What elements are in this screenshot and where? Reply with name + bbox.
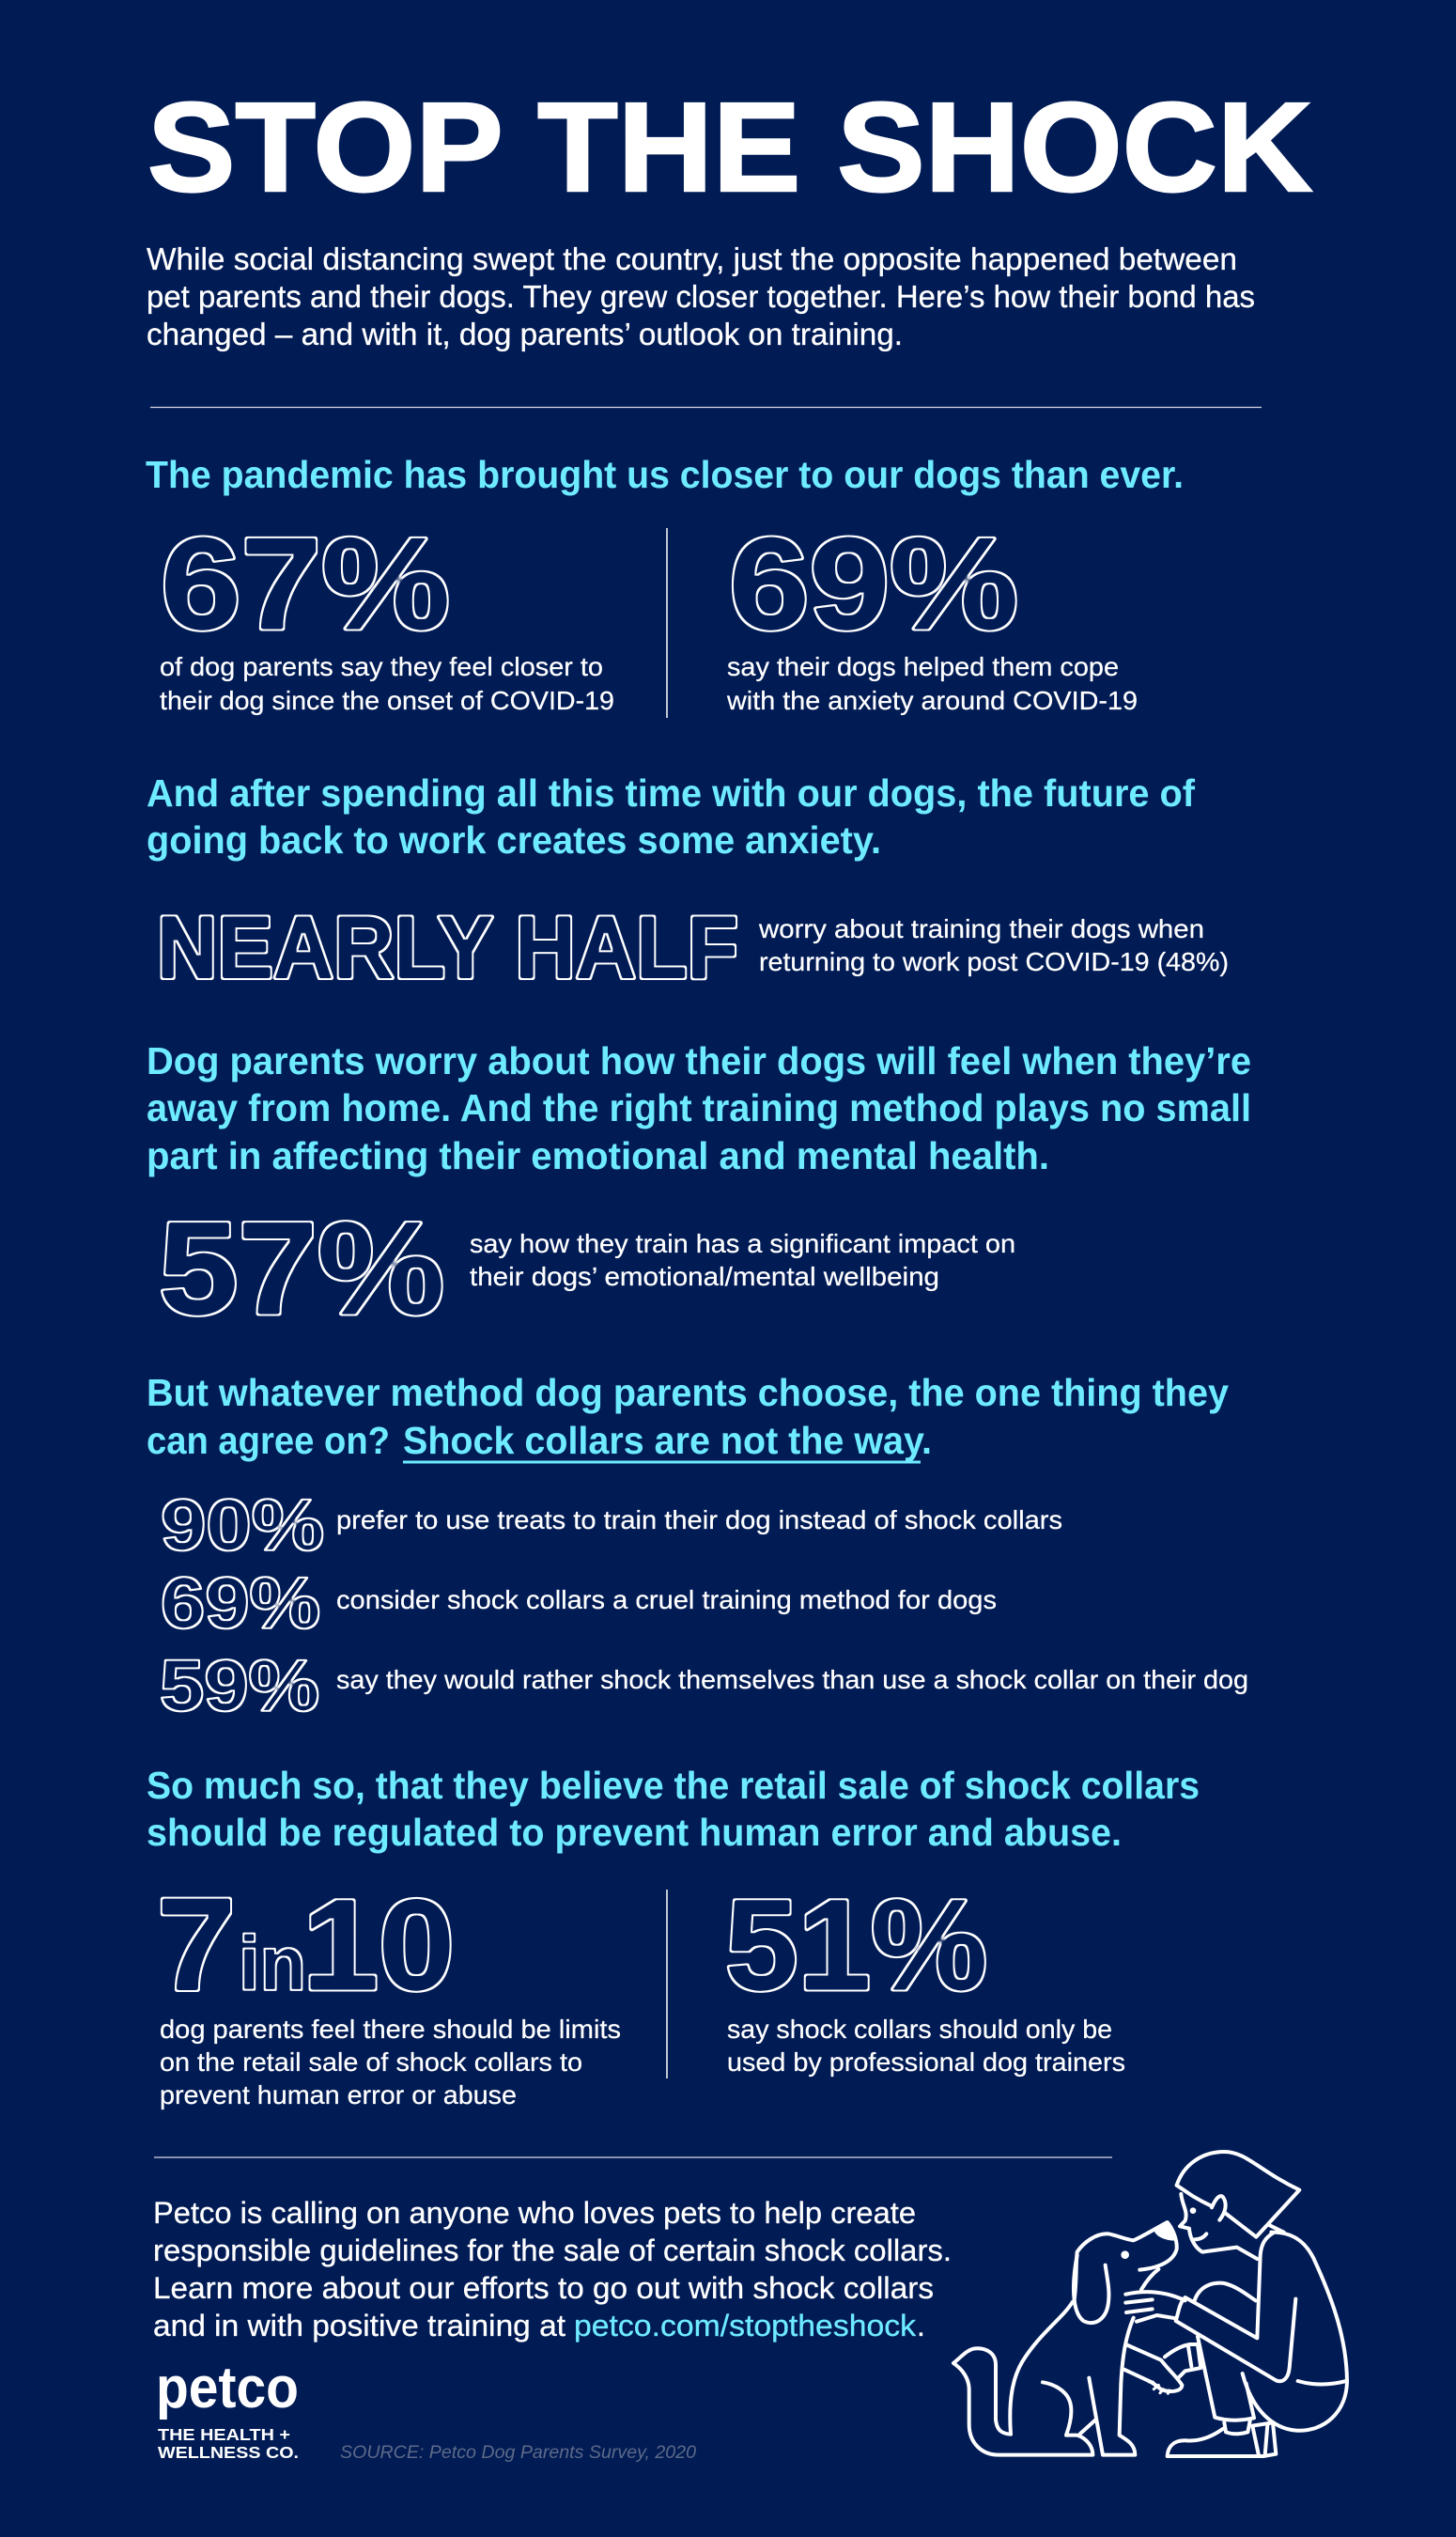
closing call to action: responsible guidelines for the sale of certain shock collars. bbox=[153, 2233, 952, 2267]
title: STOP THE SHOCK bbox=[147, 76, 1312, 218]
intro text: While social distancing swept the country, just the opposite happened between bbox=[147, 241, 1237, 276]
stat row: 69%: consider shock collars a cruel training method for dogs bbox=[336, 1585, 997, 1614]
stat: 69%: 69% bbox=[729, 511, 1018, 657]
stat row: 90%: prefer to use treats to train their dog instead of shock collars bbox=[336, 1505, 1062, 1534]
caption: nearly half: returning to work post COVID-19 (48%) bbox=[759, 947, 1229, 976]
caption: 51%: say shock collars should only be bbox=[727, 2015, 1112, 2044]
caption: 57% bbox=[470, 1229, 1015, 1291]
caption: 67%: their dog since the onset of COVID-19 bbox=[160, 686, 614, 715]
caption: 7 in 10: dog parents feel there should be limits bbox=[160, 2015, 621, 2044]
stat: 7 in 10 bbox=[157, 1870, 621, 2109]
caption: nearly half: worry about training their dogs when bbox=[758, 914, 1204, 943]
heading: back to work: And after spending all this time with our dogs, the future of bbox=[147, 771, 1195, 815]
stat: 57%: 57% bbox=[159, 1194, 444, 1342]
caption: 7 in 10 bbox=[160, 2015, 621, 2109]
dog bbox=[953, 2222, 1182, 2455]
heading: regulate retail sale: should be regulated to prevent human error and abuse. bbox=[147, 1811, 1122, 1854]
heading: shock collars are not the way: But whatever method dog parents choose, the one thing they bbox=[147, 1371, 1229, 1414]
caption: 57%: their dogs’ emotional/mental wellbeing bbox=[470, 1262, 939, 1291]
stat: 69% bbox=[726, 511, 1138, 715]
heading: worry about dogs: part in affecting their emotional and mental health. bbox=[147, 1134, 1049, 1177]
heading: shock collars are not the way: can agree on? bbox=[147, 1419, 390, 1462]
stat row: 90% bbox=[161, 1485, 1062, 1565]
heading: back to work: going back to work creates some anxiety. bbox=[147, 818, 881, 862]
caption: 51%: used by professional dog trainers bbox=[727, 2047, 1125, 2077]
closing call to action: and in with positive training at bbox=[153, 2309, 565, 2342]
stat row: 59%: say they would rather shock themselves than use a shock collar on their dog bbox=[336, 1665, 1248, 1694]
heading: worry about dogs: away from home. And the right training method plays no small bbox=[147, 1086, 1251, 1129]
intro text: pet parents and their dogs. They grew closer together. Here’s how their bond has bbox=[147, 279, 1255, 314]
petco logo bbox=[156, 2356, 299, 2462]
source note: SOURCE: Petco Dog Parents Survey, 2020 bbox=[340, 2443, 696, 2463]
heading: closer to our dogs: The pandemic has brought us closer to our dogs than ever. bbox=[146, 453, 1184, 496]
heading: worry about dogs: Dog parents worry about how their dogs will feel when they’re bbox=[147, 1039, 1251, 1082]
stat row: 69%: 69% bbox=[161, 1564, 320, 1644]
stat: 7 in 10: 10 bbox=[302, 1874, 455, 2017]
caption: 7 in 10: prevent human error or abuse bbox=[160, 2080, 517, 2109]
caption: 69%: with the anxiety around COVID-19 bbox=[726, 686, 1138, 715]
person bbox=[1125, 2152, 1347, 2456]
heading: regulate retail sale: So much so, that they believe the retail sale of shock collars bbox=[147, 1764, 1200, 1807]
petco logo: WELLNESS CO. bbox=[158, 2443, 299, 2462]
closing call to action: Learn more about our efforts to go out with shock collars bbox=[153, 2271, 934, 2305]
caption: 69%: say their dogs helped them cope bbox=[727, 652, 1119, 681]
caption: 67% bbox=[160, 652, 614, 715]
stat: nearly half: NEARLY HALF bbox=[157, 898, 738, 996]
closing call to action: Petco is calling on anyone who loves pets to help create bbox=[153, 2196, 916, 2230]
heading: worry about dogs bbox=[147, 1039, 1251, 1177]
stat: 67% bbox=[160, 511, 614, 715]
petco logo: petco bbox=[156, 2356, 299, 2420]
closing call to action: petco.com/stoptheshock bbox=[574, 2309, 917, 2342]
stat: 7 in 10: in bbox=[239, 1921, 306, 2007]
stat row: 90%: 90% bbox=[161, 1485, 324, 1565]
stat row: 69% bbox=[161, 1564, 997, 1644]
icon: person and dog illustration bbox=[953, 2152, 1347, 2456]
stat: 67%: 67% bbox=[161, 511, 450, 657]
petco logo: THE HEALTH + bbox=[158, 2425, 290, 2444]
stat row: 59%: 59% bbox=[160, 1646, 319, 1727]
heading: regulate retail sale bbox=[147, 1764, 1200, 1854]
caption: 67%: of dog parents say they feel closer to bbox=[160, 652, 603, 681]
stat: 51% bbox=[725, 1874, 1125, 2077]
stat row: 59% bbox=[160, 1646, 1248, 1727]
caption: 51% bbox=[727, 2015, 1125, 2077]
stat: 51%: 51% bbox=[725, 1874, 987, 2017]
intro text: changed – and with it, dog parents’ outlook on training. bbox=[147, 317, 903, 351]
caption: 69% bbox=[726, 652, 1138, 715]
caption: 57%: say how they train has a significant impact on bbox=[470, 1229, 1015, 1258]
heading: shock collars are not the way: Shock collars are not the way. bbox=[403, 1419, 932, 1462]
caption: nearly half bbox=[758, 914, 1229, 976]
closing call to action: . bbox=[917, 2309, 925, 2342]
closing call to action bbox=[153, 2196, 952, 2342]
caption: 7 in 10: on the retail sale of shock collars to bbox=[160, 2047, 582, 2077]
heading: shock collars are not the way bbox=[147, 1371, 1229, 1462]
heading: back to work bbox=[147, 771, 1195, 862]
stat: 7 in 10: 7 bbox=[157, 1870, 236, 2018]
intro text bbox=[147, 241, 1255, 351]
